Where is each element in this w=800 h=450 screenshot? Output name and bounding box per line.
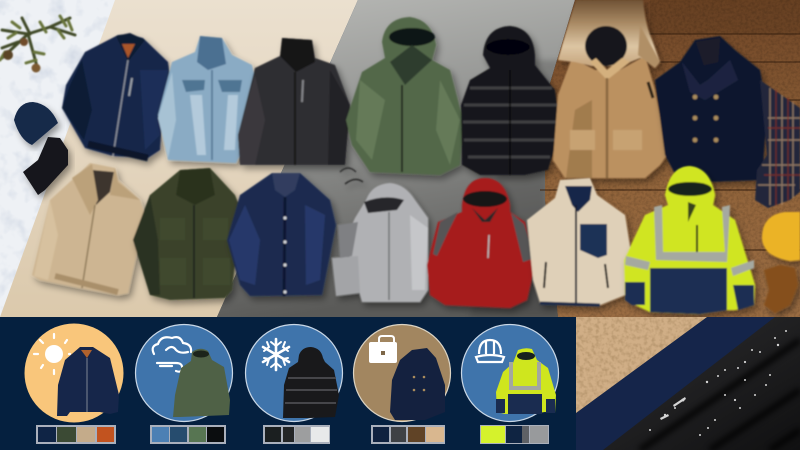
black softshell [238,38,350,165]
photo backdrop: snow, linen, concrete, wood [0,0,800,317]
green hooded shell [346,17,463,175]
fabric texture swatch [576,317,800,450]
black waterproof fabric [603,317,800,450]
swatches [371,425,445,444]
card: mild weather [24,324,124,444]
beanie [14,102,58,145]
tan harrington jacket [32,163,145,295]
navy fleece fabric [576,317,775,450]
icon: sun [34,334,70,374]
tan parka with fur hood [553,0,667,178]
olive field jacket [133,168,241,300]
jacket row two [32,163,800,314]
wet weather circle [136,324,232,422]
card: business [354,324,450,444]
swatches [150,425,226,444]
mini puffer jacket [283,347,339,418]
grey shell jacket with pouch [332,168,428,302]
concrete surface [217,0,575,317]
navy peacoat [655,36,767,183]
jacket row one [62,0,800,208]
hi-vis work jacket [624,166,755,314]
mini green shell [173,349,230,417]
leather work gloves [764,265,798,313]
sand knit fabric [576,317,707,413]
wood planks [540,0,800,317]
black puffer [461,26,560,175]
mini hi-vis jacket [496,348,556,414]
plaid scarf [755,80,800,208]
mild weather circle [24,324,124,422]
swatches [36,425,116,444]
icon: briefcase [369,336,397,363]
branch decoration [0,16,75,72]
mini peacoat [390,348,445,420]
card: workwear [462,324,558,444]
guide panel [0,317,576,450]
denim jacket [158,36,256,163]
red and grey rain jacket [427,178,535,308]
yellow hard hat [762,212,800,261]
snow surface [0,0,140,317]
card: snow and cold [246,324,342,444]
swatches [263,425,330,444]
water droplets [649,330,787,436]
black gloves [23,137,68,195]
linen fabric [0,0,358,317]
icon: wind cloud [153,337,191,372]
card: wet and windy [136,324,232,444]
cold weather circle [246,324,342,422]
icon: snowflake [263,339,289,370]
cream sherpa fleece [527,178,632,305]
business circle [354,324,450,422]
swatches [480,425,549,444]
mini bomber jacket [57,347,119,416]
navy coach jacket [227,173,336,296]
icon: hard hat [476,340,504,362]
workwear circle [462,324,558,422]
navy bomber [62,33,170,158]
